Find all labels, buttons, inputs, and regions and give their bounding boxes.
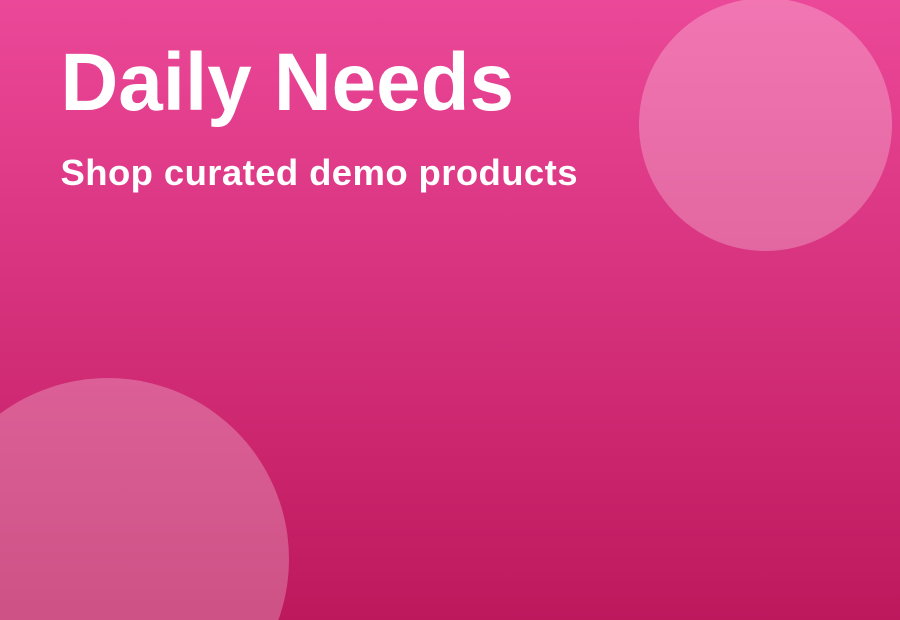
title: Daily Needs	[60, 37, 514, 128]
decorative circle: top right	[639, 0, 892, 251]
decorative circle: bottom left	[0, 378, 289, 620]
subtitle: Shop curated demo products	[60, 152, 578, 193]
